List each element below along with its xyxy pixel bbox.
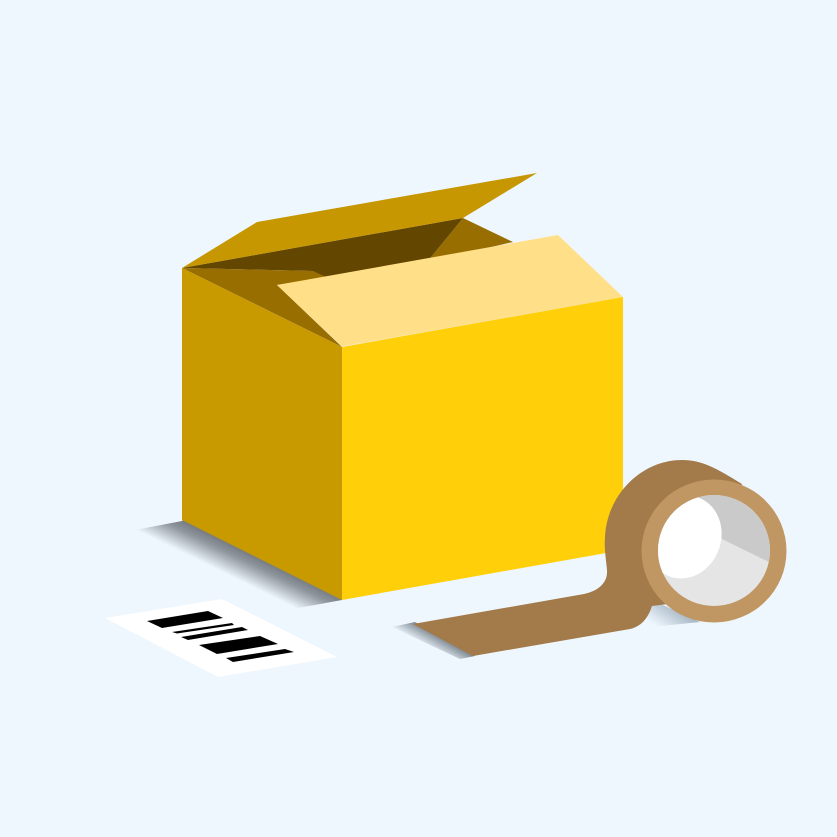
tape roll shadow	[642, 600, 700, 628]
core shaded wall	[699, 495, 770, 562]
left face	[182, 268, 342, 600]
tape body and strip	[413, 460, 742, 656]
back open flap	[182, 173, 537, 268]
illustration: box, tape and label	[106, 173, 786, 677]
tape strip shadow	[392, 622, 475, 659]
barcode label	[105, 599, 337, 677]
box interior dark	[182, 218, 463, 280]
front flap	[277, 235, 623, 346]
left inner flap	[182, 268, 342, 347]
tape roll	[413, 460, 786, 656]
core opening	[658, 498, 722, 578]
box shadow	[135, 515, 350, 609]
front face	[342, 297, 623, 600]
tape outer ring	[642, 480, 786, 622]
tape core	[658, 495, 770, 606]
cardboard box	[182, 173, 623, 600]
box interior right wall	[427, 218, 513, 262]
